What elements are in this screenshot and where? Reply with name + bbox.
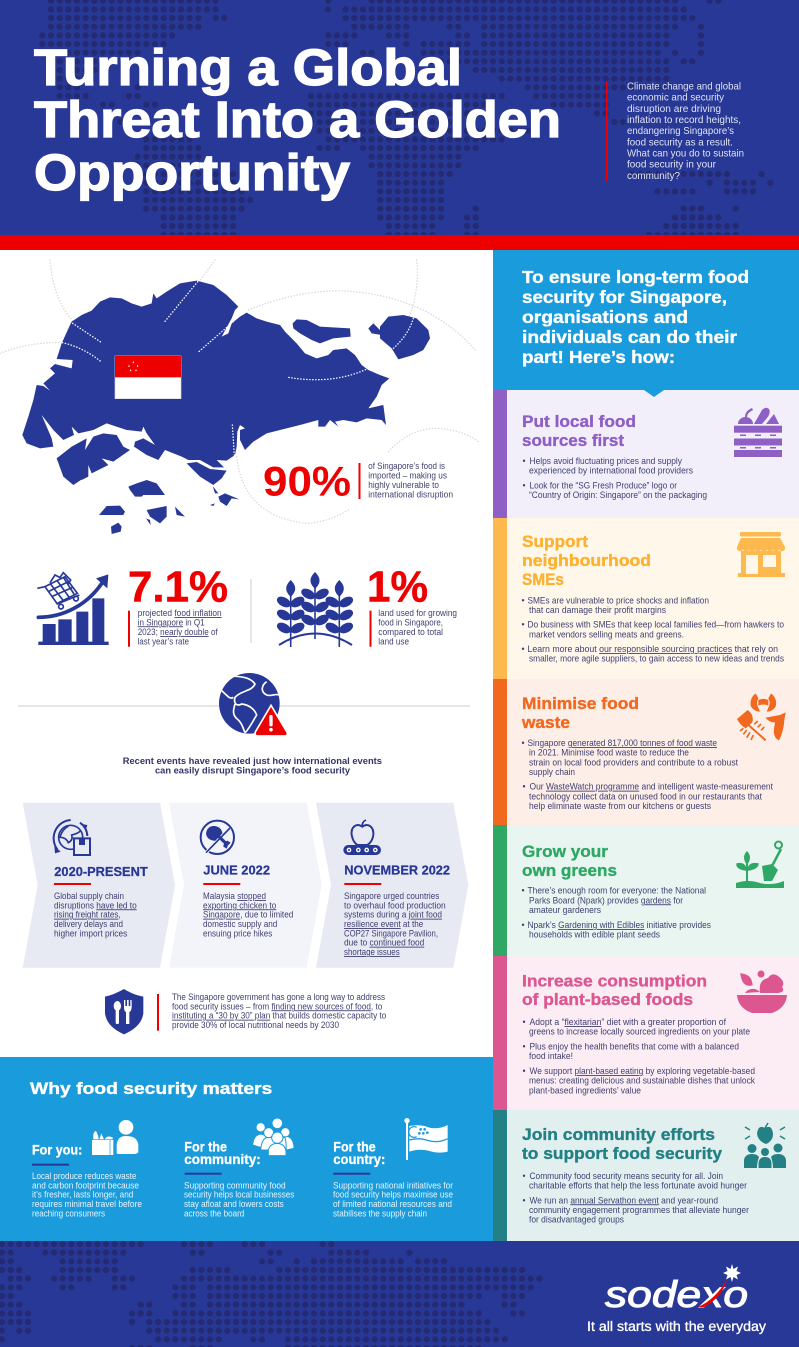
icon: no chicken	[201, 821, 234, 854]
column: for you: reaching consumers	[32, 1208, 106, 1218]
dotted arcs	[0, 260, 478, 523]
icon: person with groceries	[92, 1120, 138, 1155]
intro text: endangering Singapore’s	[627, 126, 734, 137]
panel: right column intro: organisations and	[522, 307, 688, 327]
icon: shop	[737, 532, 785, 577]
body text: systems during a joint food	[344, 910, 442, 920]
heading: 2020-PRESENT	[54, 864, 148, 879]
intro text: food security as a result.	[627, 137, 733, 148]
red rule	[203, 883, 240, 885]
panel: put local food sources first	[493, 390, 799, 518]
flag	[115, 356, 181, 399]
column: for you	[32, 1120, 142, 1218]
tagline: It all starts with the everyday	[587, 1319, 766, 1334]
icon: food crate	[734, 408, 782, 457]
column: for the country: stabilises the supply chain	[333, 1208, 427, 1218]
bullet text: There’s enough room for everyone: the National	[528, 886, 706, 896]
panel: right column intro: part! Here’s how:	[522, 347, 675, 367]
column: for you: it’s fresher, lasts longer, and	[32, 1190, 133, 1200]
body text	[344, 891, 446, 957]
panel: november 2022	[316, 803, 468, 968]
title	[34, 39, 561, 201]
bullet text: We support plant-based eating by exploring vegetable-based	[530, 1066, 755, 1076]
column: for you: requires minimal travel before	[32, 1199, 142, 1209]
notch arrow	[644, 390, 664, 397]
bullet text: Do business with SMEs that keep local families fed—from hawkers to	[528, 620, 784, 630]
header banner	[0, 0, 799, 235]
bullet text: •	[522, 1017, 526, 1027]
panel: join community efforts	[493, 1110, 799, 1241]
stat: 7.1 percent: last year’s rate	[138, 636, 189, 646]
stat: 1 percent: land use	[378, 636, 409, 646]
intro text: disruption are driving	[627, 104, 721, 115]
column: for you: For you:	[32, 1141, 82, 1157]
bullet text: •	[522, 620, 525, 630]
column: for the community: community:	[184, 1151, 261, 1167]
column: for the country	[333, 1118, 453, 1218]
body text: Global supply chain	[54, 891, 124, 901]
bullet text: Npark’s Gardening with Edibles initiative provides	[528, 920, 712, 930]
bullet text: menus: creating delicious and sustainable dishes that unlock	[529, 1076, 756, 1086]
dotted world map	[2, 1244, 540, 1347]
heading: SMEs	[522, 571, 564, 589]
body text: COP27 Singapore Pavilion,	[344, 928, 438, 938]
heading: of plant-based foods	[522, 991, 693, 1009]
panel: right column intro: To ensure long-term food	[522, 267, 749, 287]
heading	[522, 533, 651, 589]
bullet text: greens to increase locally sourced ingredients on your plate	[529, 1027, 750, 1037]
bullet text: experienced by international food providers	[529, 466, 694, 476]
main island	[22, 281, 389, 467]
column: for the country: Supporting national initiatives for	[333, 1180, 453, 1190]
icon: supply chain globe	[54, 820, 90, 855]
stat: 90 percent	[263, 458, 453, 505]
red rule	[344, 883, 381, 885]
stat: 1 percent: land used for growing	[378, 608, 457, 618]
panel: right column intro: security for Singapore,	[522, 287, 727, 307]
callout: government plan: food security issues – from finding new sources of food, to	[172, 1001, 382, 1011]
red rule	[54, 883, 91, 885]
icon: shield with cutlery	[105, 989, 143, 1034]
body text: Singapore urged countries	[344, 891, 440, 901]
heading: Join community efforts	[522, 1126, 715, 1144]
panel: why food security matters	[0, 1057, 493, 1241]
panel: increase consumption of plant-based foods	[493, 956, 799, 1110]
heading: Grow your	[522, 843, 609, 861]
body text	[203, 891, 293, 938]
footer band	[0, 1241, 799, 1347]
bullet text	[522, 738, 774, 811]
icon: wheat	[275, 572, 355, 647]
callout: government plan	[157, 992, 386, 1031]
callout: government plan: The Singapore government has gone a long way to address	[172, 992, 386, 1002]
bullet text: smaller, more agile suppliers, to gain access to new ideas and trends	[529, 654, 785, 664]
bullet text: strain on local food providers and contribute to a robust	[529, 757, 739, 767]
heading: JUNE 2022	[203, 862, 270, 877]
stat: 90 percent: 90%	[263, 458, 351, 505]
panel: right column intro	[493, 250, 799, 390]
panel: minimise food waste	[493, 679, 799, 825]
stat: 90 percent: international disruption	[368, 490, 453, 500]
column: for the community: Supporting community food	[184, 1180, 286, 1190]
stat: 7.1 percent: projected food inflation	[138, 608, 222, 618]
bullet text: households with edible plant seeds	[529, 930, 661, 940]
subheading: recent events	[123, 755, 382, 775]
body text: due to continued food	[344, 938, 424, 948]
dotted region lines	[62, 282, 413, 455]
column: for you: Local produce reduces waste	[32, 1171, 136, 1181]
body text: Singapore, due to limited	[203, 910, 293, 920]
heading: Support	[522, 533, 589, 551]
intro text: Climate change and global	[627, 82, 741, 92]
bullet text: Our WasteWatch programme and intelligent waste-measurement	[530, 782, 774, 792]
bullet text: Plus enjoy the health benefits that come with a balanced	[530, 1041, 739, 1051]
subheading: recent events: Recent events have revealed just how international events	[123, 755, 382, 766]
islands	[57, 315, 430, 534]
heading	[522, 843, 617, 880]
bullet text: Adopt a “flexitarian” diet with a greater proportion of	[530, 1017, 727, 1027]
column: for the community: across the board	[184, 1208, 244, 1218]
stat: 90 percent: imported – making us	[368, 470, 448, 480]
heading	[522, 973, 707, 1009]
heading: NOVEMBER 2022	[344, 862, 450, 877]
panel: support neighbourhood smes	[493, 518, 799, 679]
heading: waste	[521, 714, 570, 732]
stat: 1 percent	[367, 563, 457, 647]
icon: singapore flag on pole	[404, 1118, 448, 1160]
icon: apple on conveyor	[343, 820, 381, 855]
bullet text: plant-based ingredients’ value	[529, 1085, 641, 1095]
bullet text	[522, 886, 712, 940]
bullet text: •	[522, 886, 525, 896]
bullet text: market vendors selling meats and greens.	[529, 629, 684, 639]
bullet text	[522, 1171, 749, 1225]
bullet text: “Country of Origin: Singapore” on the packaging	[529, 490, 707, 500]
intro text: food security in your	[627, 160, 717, 171]
bullet text: Look for the “SG Fresh Produce” logo or	[530, 481, 677, 491]
bullet text: in 2021. Minimise food waste to reduce the	[529, 748, 689, 758]
divider between stats	[250, 579, 252, 643]
bullet text	[522, 456, 707, 500]
title: Threat Into a Golden	[34, 91, 561, 148]
sodexo logo	[605, 1264, 748, 1315]
column: for the country: country:	[333, 1151, 385, 1167]
bullet text: •	[522, 738, 525, 748]
bullet text: •	[522, 456, 526, 466]
heading: own greens	[522, 862, 617, 880]
bullet text: Community food security means security for all. Join	[530, 1171, 723, 1181]
section divider line	[18, 705, 470, 707]
bullet text: Learn more about our responsible sourcing practices that rely on	[528, 644, 778, 654]
bullet text: food intake!	[529, 1051, 573, 1061]
intro text: What can you do to sustain	[627, 148, 744, 160]
bullet text: We run an annual Servathon event and year-round	[530, 1195, 718, 1205]
bullet text: •	[522, 481, 526, 491]
panel: grow your own greens	[493, 825, 799, 956]
bullet text: Parks Board (Npark) provides gardens for	[529, 895, 683, 905]
stat: 90 percent: of Singapore’s food is	[368, 461, 446, 471]
bullet text: Helps avoid fluctuating prices and supply	[530, 456, 683, 466]
singapore map	[0, 260, 478, 534]
heading: Why food security matters	[30, 1080, 272, 1098]
body text: higher import prices	[54, 928, 128, 938]
icon: group of people	[253, 1118, 294, 1156]
bullet text: amateur gardeners	[529, 905, 602, 915]
bullet text: •	[522, 782, 526, 792]
body text: Malaysia stopped	[203, 891, 266, 901]
icon: salad bowl	[737, 970, 787, 1013]
subheading: recent events: can easily disrupt Singapore’s food security	[155, 764, 351, 775]
bullet text: •	[522, 1066, 526, 1076]
bullet text: that can damage their profit margins	[529, 605, 667, 615]
bullet text: •	[522, 595, 525, 605]
body text: ensuing price hikes	[203, 928, 273, 938]
title: Turning a Global	[34, 39, 462, 96]
column: for the country: For the	[333, 1139, 376, 1155]
bullet text: charitable efforts that help the less fortunate avoid hunger	[529, 1181, 747, 1191]
stat: 7.1 percent	[128, 563, 228, 647]
panel: left white column	[0, 250, 493, 1057]
body text: resilience event at the	[344, 919, 423, 929]
bullet text: •	[522, 644, 525, 654]
bullet text: help eliminate waste from our kitchens or guests	[529, 801, 712, 811]
heading: neighbourhood	[522, 552, 651, 570]
intro text: community?	[627, 171, 680, 182]
bullet text	[522, 1017, 756, 1095]
panel: 2020-present	[23, 803, 175, 968]
heading: Increase consumption	[522, 973, 707, 991]
intro text: economic and security	[627, 93, 725, 104]
icon: globe warning	[219, 673, 287, 736]
bullet text: Singapore generated 817,000 tonnes of food waste	[528, 738, 717, 748]
icon: food scraps	[737, 693, 786, 740]
bullet text: •	[522, 920, 525, 930]
bullet text: •	[522, 1195, 526, 1205]
bullet text	[522, 595, 785, 664]
body text: disruptions have led to	[54, 900, 137, 910]
bullet text: •	[522, 1041, 526, 1051]
body text: to overhaul food production	[344, 900, 446, 910]
bullet text: technology collect data on unused food in our restaurants that	[529, 791, 763, 801]
intro text: inflation to record heights,	[627, 115, 741, 126]
stat: 1 percent: compared to total	[378, 627, 443, 637]
stat: 90 percent: highly vulnerable to	[368, 480, 439, 490]
icon: plant and shovel	[736, 842, 784, 888]
body text: delivery delays and	[54, 919, 123, 929]
heading	[522, 1126, 723, 1163]
bullet text: community engagement programmes that alleviate hunger	[529, 1205, 749, 1215]
column: for the community: stay afloat and lowers costs	[184, 1199, 284, 1209]
column: for the community	[184, 1118, 295, 1218]
callout: government plan: provide 30% of local nutritional needs by 2030	[172, 1020, 339, 1030]
red divider band	[0, 235, 799, 250]
stat: 1 percent: food in Singapore,	[378, 617, 443, 627]
icon: community with apple	[744, 1123, 786, 1168]
column: for the country: food security helps maximise use	[333, 1190, 453, 1200]
bullet text: •	[522, 1171, 526, 1181]
panel: right column intro: individuals can do their	[522, 327, 737, 347]
heading	[522, 413, 636, 450]
column: for you: and carbon footprint because	[32, 1180, 139, 1190]
body text: exporting chicken to	[203, 900, 276, 910]
bullet text: SMEs are vulnerable to price shocks and inflation	[528, 595, 709, 605]
title: Opportunity	[34, 144, 351, 201]
callout: government plan: instituting a “30 by 30” plan that builds domestic capacity to	[172, 1011, 386, 1021]
stat: 1 percent: 1%	[367, 563, 428, 612]
body text: shortage issues	[344, 947, 400, 957]
column: for the community: For the	[184, 1139, 227, 1155]
stat: 7.1 percent: 7.1%	[128, 563, 228, 612]
column: for the country: of limited national resources and	[333, 1199, 452, 1209]
panel: june 2022	[169, 803, 322, 968]
intro text	[606, 81, 744, 182]
heading: Minimise food	[522, 695, 639, 713]
sodexo logo: sodexo	[605, 1274, 748, 1315]
bullet text: supply chain	[529, 767, 575, 777]
body text	[54, 891, 137, 938]
stat: 7.1 percent: 2023; nearly double of	[138, 627, 218, 637]
heading	[521, 695, 639, 732]
icon: food inflation chart with cart	[37, 573, 109, 645]
dotted world map	[42, 1, 771, 235]
heading: to support food security	[522, 1145, 723, 1163]
stat: 7.1 percent: in Singapore in Q1	[138, 617, 205, 627]
heading: Put local food	[522, 413, 636, 431]
bullet text: for disadvantaged groups	[529, 1215, 625, 1225]
heading: sources first	[522, 432, 625, 450]
body text: rising freight rates,	[54, 910, 121, 920]
body text: domestic supply and	[203, 919, 277, 929]
column: for the community: security helps local businesses	[184, 1190, 295, 1200]
